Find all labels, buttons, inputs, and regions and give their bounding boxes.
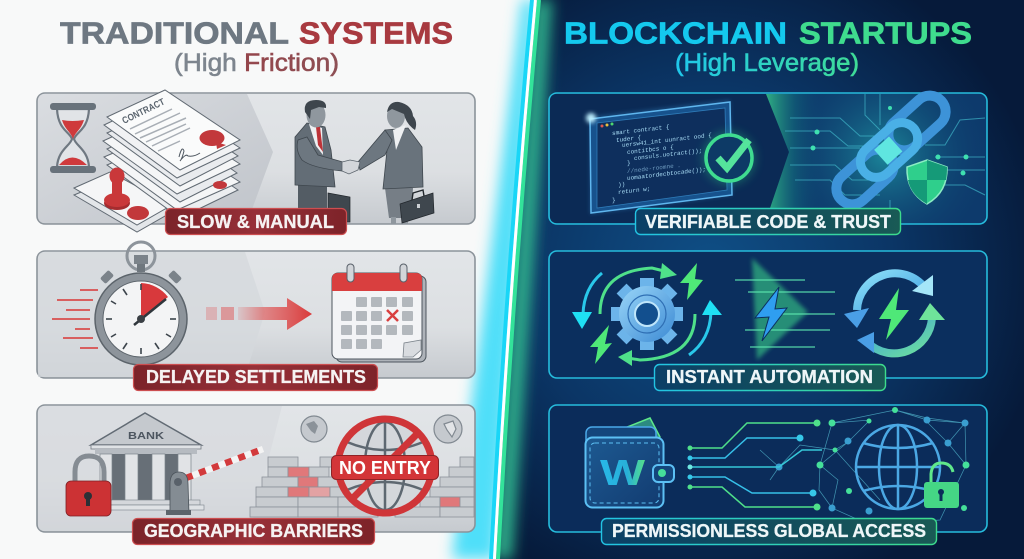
panel: slow and manual xyxy=(37,90,475,232)
code text: uomaatordecbtocade()); xyxy=(627,166,706,182)
icon: hourglass xyxy=(50,103,96,173)
code text: return w; xyxy=(618,185,650,196)
icon: cyan arrows xyxy=(572,273,722,355)
icon: rubber stamp xyxy=(104,168,130,210)
contract text and lines: CONTRACT xyxy=(120,97,167,127)
icon: no entry globe: NO ENTRY xyxy=(339,458,431,478)
icon: chain links xyxy=(830,89,952,211)
icon: businessman xyxy=(295,100,343,224)
icon: check circle xyxy=(703,132,755,184)
title: Blockchain Startups: BLOCKCHAIN xyxy=(564,16,787,50)
title: Traditional Systems: SYSTEMS xyxy=(299,16,453,50)
label: delayed settlements: DELAYED SETTLEMENTS xyxy=(146,367,366,387)
icon: businesswoman xyxy=(358,102,423,224)
code text: uersw41_int uunract ood { xyxy=(622,132,712,149)
icon: center bolt xyxy=(755,287,787,341)
code text: tuder { xyxy=(616,134,642,144)
label: delayed settlements xyxy=(134,364,378,390)
icon: wax seals xyxy=(127,130,227,220)
divider line xyxy=(491,0,539,559)
icon: open padlock xyxy=(924,463,959,508)
icon: bank xyxy=(91,413,204,510)
icon: globe xyxy=(856,425,940,509)
code text xyxy=(612,119,712,204)
panel: geographic barriers xyxy=(37,405,475,532)
network mesh xyxy=(760,410,966,525)
panel: delayed settlements xyxy=(37,242,475,378)
code text: )) xyxy=(618,181,625,189)
icon: gear xyxy=(611,278,683,350)
icon: stopwatch xyxy=(95,242,187,365)
icon: code window xyxy=(586,100,732,214)
label: instant automation: INSTANT AUTOMATION xyxy=(666,367,873,387)
icon: bank: BANK xyxy=(128,431,165,442)
icon: cycle bolt xyxy=(879,288,909,340)
title: Traditional Systems: TRADITIONAL xyxy=(60,16,289,50)
contract text and lines xyxy=(120,97,200,161)
code text: } xyxy=(627,160,631,167)
icon: refresh cycle xyxy=(844,273,945,353)
icon: handshake xyxy=(342,160,360,174)
circuit traces xyxy=(785,94,985,223)
icon: shield xyxy=(907,160,947,204)
title: Blockchain Startups: STARTUPS xyxy=(799,16,972,50)
background: light left half xyxy=(0,0,540,559)
icon: green cycle arrows xyxy=(600,263,695,366)
icon: wallet xyxy=(586,418,674,508)
arrow: delay xyxy=(206,298,312,330)
label: instant automation xyxy=(654,364,886,390)
icon: boom barrier xyxy=(166,449,263,515)
label: slow and manual: SLOW & MANUAL xyxy=(177,212,334,232)
icon: briefcases xyxy=(328,190,434,223)
glow left of divider xyxy=(452,0,536,559)
icon: paper stack xyxy=(74,90,240,232)
icon: wallet: W xyxy=(600,452,645,493)
panel: verifiable code and trust xyxy=(549,89,987,224)
label: geographic barriers: GEOGRAPHIC BARRIERS xyxy=(144,521,363,541)
title: Blockchain Startups xyxy=(564,16,972,50)
connection lines xyxy=(689,423,822,507)
code text: consuls.uotract()); xyxy=(634,147,702,162)
icon: padlock xyxy=(66,456,111,516)
subtitle: High Leverage: (High Leverage) xyxy=(675,49,859,77)
code text: //nede-roomne . xyxy=(627,162,681,175)
glow right of divider xyxy=(494,0,552,559)
icon: no entry globe xyxy=(332,419,438,513)
label: permissionless global access: PERMISSIONLESS GLOBAL ACCESS xyxy=(612,521,926,541)
icon: brick wall xyxy=(250,457,474,517)
subtitle: High Friction: (High Friction) xyxy=(174,49,339,77)
icon: small globes xyxy=(301,415,462,443)
icon: calendar xyxy=(332,264,426,362)
code text: smart contract { xyxy=(612,123,670,137)
panel: instant automation xyxy=(549,251,987,378)
label: verifiable code and trust: VERIFIABLE CODE & TRUST xyxy=(645,212,891,232)
icon: lightning bolts xyxy=(590,263,703,364)
code text: contitbcs o { xyxy=(627,144,674,156)
label: slow and manual xyxy=(166,208,346,234)
code text: } xyxy=(612,197,616,204)
panel: permissionless global access xyxy=(549,405,987,532)
title: Traditional Systems xyxy=(60,16,453,50)
background: dark right half xyxy=(494,0,1024,559)
icon: motion lines xyxy=(52,290,98,348)
speed streaks and chevron xyxy=(735,258,835,360)
